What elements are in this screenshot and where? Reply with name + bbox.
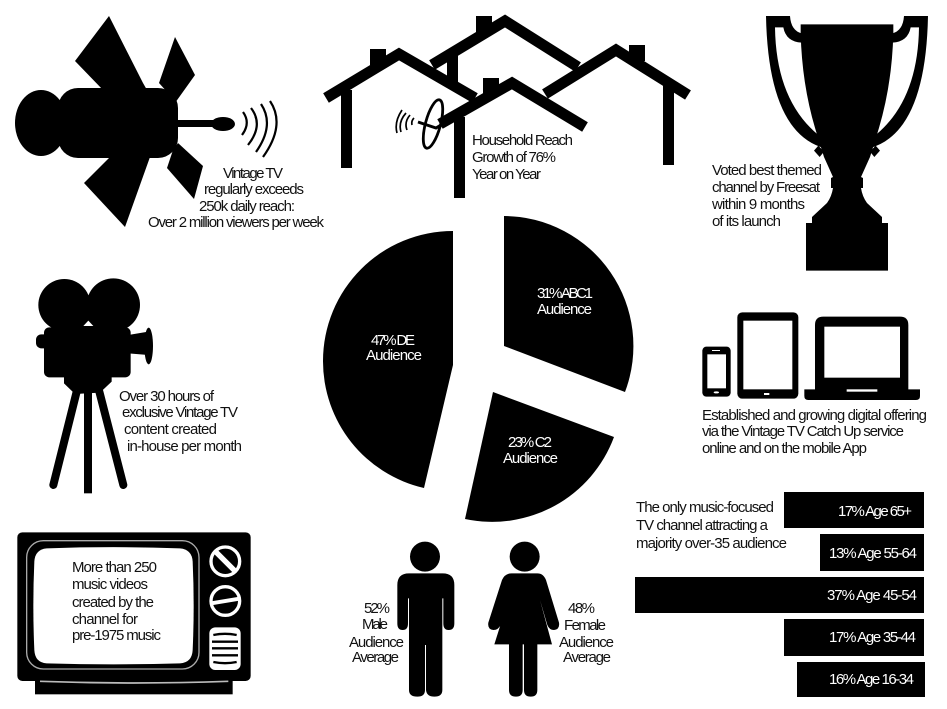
icon: vintage television xyxy=(17,532,251,694)
text: in-house content: exclusive Vintage TV xyxy=(122,404,238,421)
text: daily reach xyxy=(148,165,324,231)
text: music videos xyxy=(72,559,162,644)
text: household reach: Growth of 76% xyxy=(472,149,556,166)
pie chart: audience social grade xyxy=(323,216,633,522)
text: digital offering xyxy=(702,407,927,457)
text: award: of its launch xyxy=(712,213,781,230)
bar: age 65+: 17% Age 65+ xyxy=(838,503,912,520)
text: male audience: Average xyxy=(352,649,399,666)
slice: 23% C2: 23% C2 xyxy=(508,434,552,451)
bar: age 45-54 xyxy=(635,577,924,613)
text: in-house content: Over 30 hours of xyxy=(119,388,215,405)
panel: award xyxy=(711,16,928,271)
icon: male figure xyxy=(397,542,454,697)
icon: female figure xyxy=(488,542,559,697)
text: daily reach: Vintage TV xyxy=(223,165,283,182)
slice: 31% ABC1: Audience xyxy=(537,301,592,318)
bar: age 16-34 xyxy=(797,662,925,697)
icon: trophy xyxy=(766,16,928,271)
slice: 31% ABC1: 31% ABC1 xyxy=(537,285,593,302)
text: award: channel by Freesat xyxy=(712,179,821,196)
text: award: within 9 months xyxy=(711,196,805,213)
bar: age 55-64: 13% Age 55-64 xyxy=(829,545,917,562)
text: music videos: More than 250 xyxy=(72,559,157,576)
icon: phone, tablet, laptop xyxy=(702,312,920,400)
bar: age 45-54: 37% Age 45-54 xyxy=(827,587,917,604)
text: household reach: Year on Year xyxy=(472,166,541,183)
text: daily reach: regularly exceeds xyxy=(204,181,304,198)
text: age intro: The only music-focused xyxy=(636,499,774,516)
text: male audience xyxy=(349,600,404,666)
text: in-house content: in-house per month xyxy=(127,438,242,455)
slice: 31% ABC1 xyxy=(504,216,633,392)
text: digital offering: Established and growing digital offering xyxy=(702,407,927,424)
text: age intro: TV channel attracting a xyxy=(636,517,769,534)
text: female audience: Audience xyxy=(559,634,614,651)
text: daily reach: Over 2 million viewers per week xyxy=(148,214,324,231)
text: award xyxy=(711,162,822,230)
text: in-house content xyxy=(119,388,242,455)
text: household reach xyxy=(472,132,573,183)
text: female audience: Female xyxy=(564,617,606,634)
text: music videos: music videos xyxy=(72,576,148,593)
text: age intro xyxy=(636,499,787,552)
text: female audience: 48% xyxy=(568,600,595,617)
icon: broadcast camera xyxy=(15,16,277,227)
text: household reach: Household Reach xyxy=(472,132,573,149)
panel: in-house content xyxy=(36,278,242,493)
text: music videos: pre-1975 music xyxy=(72,627,162,644)
text: digital offering: online and on the mobile App xyxy=(702,440,867,457)
text: male audience: 52% xyxy=(364,600,390,617)
icon: houses xyxy=(326,16,688,198)
slice: 47% DE xyxy=(323,231,453,488)
bar: age 35-44: 17% Age 35-44 xyxy=(829,629,916,646)
slice: 23% C2 xyxy=(465,392,614,522)
panel: digital offering xyxy=(702,312,927,457)
text: female audience xyxy=(559,600,614,666)
slice: 47% DE: 47% DE xyxy=(371,332,415,349)
bar: age 35-44 xyxy=(784,619,924,656)
bar chart: audience age xyxy=(635,492,925,697)
text: award: Voted best themed xyxy=(712,162,822,179)
panel: music videos xyxy=(17,532,251,694)
text: music videos: channel for xyxy=(72,611,138,628)
text: daily reach: 250k daily reach: xyxy=(199,198,295,215)
slice: 23% C2: Audience xyxy=(503,450,558,467)
text: age intro: majority over-35 audience xyxy=(636,535,787,552)
text: digital offering: via the Vintage TV Catch Up service xyxy=(702,423,904,440)
panel: daily reach xyxy=(15,16,324,231)
bar: age 65+ xyxy=(784,492,924,528)
text: male audience: Male xyxy=(362,616,388,633)
text: male audience: Audience xyxy=(349,634,404,651)
panel: household reach xyxy=(326,16,688,198)
bar: age 55-64 xyxy=(820,534,924,571)
icon: film camera on tripod xyxy=(36,278,153,493)
text: female audience: Average xyxy=(563,649,611,666)
icon: satellite dish xyxy=(396,98,447,150)
slice: 47% DE: Audience xyxy=(366,347,422,364)
bar: age 16-34: 16% Age 16-34 xyxy=(829,671,914,688)
text: music videos: created by the xyxy=(72,594,154,611)
panel: gender split xyxy=(349,542,614,697)
text: in-house content: content created xyxy=(124,421,217,438)
